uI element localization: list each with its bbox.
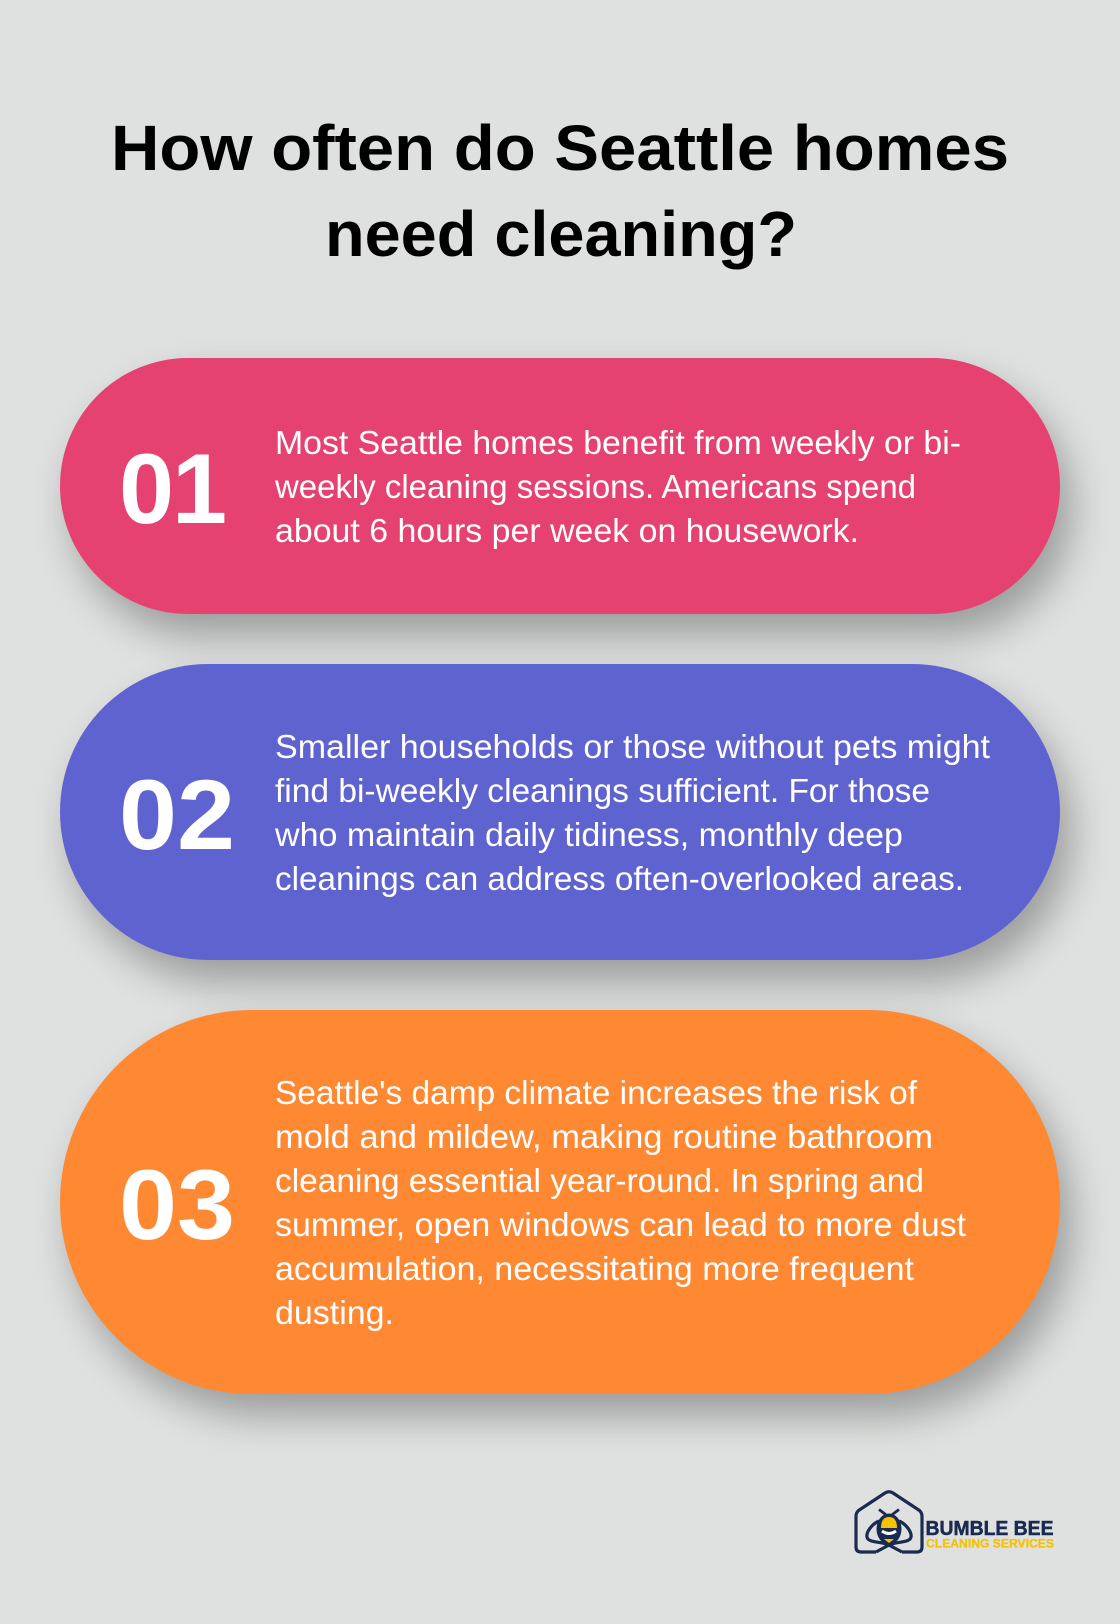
text: step 01: weekly cleaning sessions. Americans spend <box>274 468 916 505</box>
number 01: 1 <box>172 433 227 544</box>
panel: step 01 <box>60 358 1072 636</box>
text: step 03: accumulation, necessitating more frequent <box>275 1250 914 1287</box>
text: step 02: who maintain daily tidiness, monthly deep <box>274 816 903 853</box>
text: step 03 <box>275 1074 966 1331</box>
text: step 02 <box>274 728 990 897</box>
title <box>111 112 1009 270</box>
text: step 03: Seattle's damp climate increases the risk of <box>275 1074 918 1111</box>
logo: Bumble Bee Cleaning Services: CLEANING SERVICES <box>926 1536 1054 1550</box>
text: step 01: Most Seattle homes benefit from weekly or bi- <box>275 424 961 461</box>
title: How often do Seattle homes <box>111 112 1009 184</box>
text: step 01 <box>274 424 961 549</box>
text: step 01: about 6 hours per week on housework. <box>275 512 859 549</box>
text: step 03: summer, open windows can lead to more dust <box>275 1206 966 1243</box>
number 01 <box>119 433 227 544</box>
number 03: 03 <box>119 1149 235 1260</box>
panel: step 02 <box>60 664 1072 982</box>
text: step 03: mold and mildew, making routine bathroom <box>275 1118 933 1155</box>
text: step 03: dusting. <box>275 1294 394 1331</box>
text: step 02: Smaller households or those without pets might <box>275 728 990 765</box>
panel: step 03 <box>60 1010 1072 1416</box>
number 02: 02 <box>119 759 235 870</box>
text: step 02: cleanings can address often-overlooked areas. <box>275 860 964 897</box>
title: need cleaning? <box>325 198 797 270</box>
text: step 03: cleaning essential year-round. In spring and <box>275 1162 924 1199</box>
number 01: 0 <box>119 433 174 544</box>
icon: house with bee <box>856 1492 922 1552</box>
logo: Bumble Bee Cleaning Services: BUMBLE BEE <box>926 1518 1054 1540</box>
text: step 02: find bi-weekly cleanings sufficient. For those <box>275 772 930 809</box>
logo: Bumble Bee Cleaning Services <box>856 1492 1054 1552</box>
